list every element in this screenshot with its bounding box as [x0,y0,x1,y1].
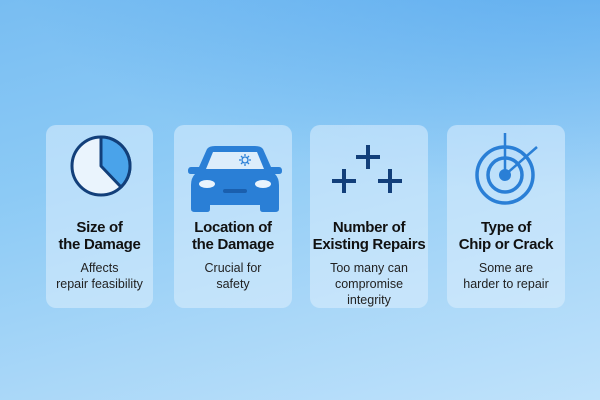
heading [313,219,426,253]
text: compromise [335,277,403,291]
text [330,261,408,307]
heading [459,219,554,253]
heading: Chip or Crack [459,236,553,253]
icon: target [475,133,538,205]
text [56,261,143,291]
heading [58,219,141,253]
heading: the Damage [192,236,274,253]
heading: Number of [333,219,405,236]
icon: pie chart [70,136,132,196]
text: Affects [80,261,118,275]
heading: Size of [76,219,123,236]
text [463,261,549,291]
panel: size of damage [46,125,153,308]
text: safety [216,277,250,291]
heading: Existing Repairs [313,236,425,253]
text: Some are [479,261,533,275]
icon: car [188,146,282,212]
text: Crucial for [205,261,261,275]
panel: type [447,125,565,308]
text: harder to repair [463,277,549,291]
text: Too many can [330,261,408,275]
panel: location [174,125,292,308]
text: repair feasibility [56,277,143,291]
panel: repairs [310,125,428,308]
text: integrity [347,293,391,307]
heading [192,219,274,253]
heading: the Damage [58,236,141,253]
text [205,261,262,291]
icon: plus signs [332,145,402,193]
heading: Type of [481,219,531,236]
heading: Location of [194,219,272,236]
